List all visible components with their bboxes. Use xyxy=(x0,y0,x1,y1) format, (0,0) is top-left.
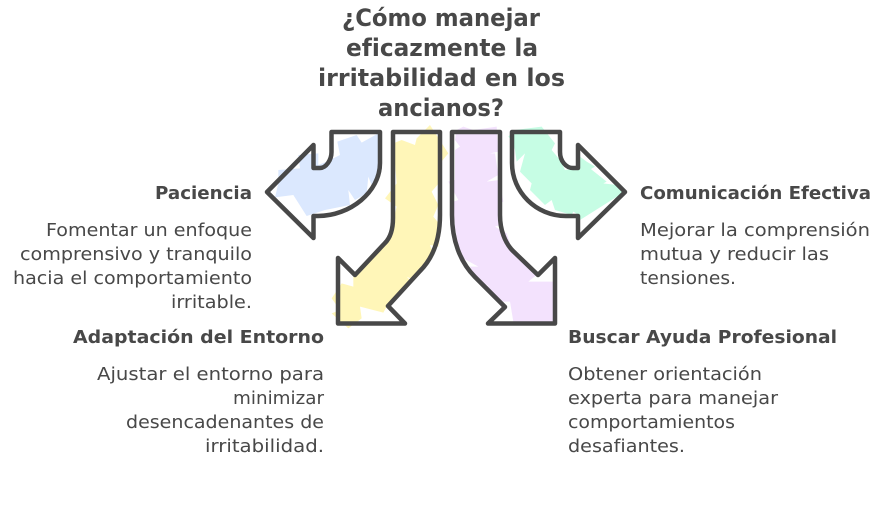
text block: Comunicación Efectiva xyxy=(640,220,870,289)
text block: Adaptación del Entorno: Ajustar el entorno para xyxy=(97,364,324,385)
text block: Paciencia xyxy=(13,220,252,313)
text block: Adaptación del Entorno: minimizar xyxy=(233,388,325,409)
text block: Buscar Ayuda Profesional: desafiantes. xyxy=(568,436,685,457)
title: eficazmente la xyxy=(346,34,538,62)
title: ¿Cómo manejar xyxy=(342,4,540,32)
title: irritabilidad en los xyxy=(318,64,565,92)
text block: Buscar Ayuda Profesional: Obtener orientación xyxy=(568,364,762,385)
text block: Paciencia: Fomentar un enfoque xyxy=(46,220,252,241)
text block: Comunicación Efectiva: mutua y reducir las xyxy=(640,244,829,265)
heading: Adaptación del Entorno: Adaptación del Entorno xyxy=(73,328,324,348)
title xyxy=(318,4,565,122)
text block: Paciencia: irritable. xyxy=(171,292,252,313)
title: ancianos? xyxy=(378,94,504,122)
arrow: green, Comunicación Efectiva xyxy=(508,127,625,238)
text block: Adaptación del Entorno: irritabilidad. xyxy=(205,436,324,457)
text block: Adaptación del Entorno xyxy=(97,364,325,457)
text block: Buscar Ayuda Profesional xyxy=(568,364,779,457)
heading: Paciencia: Paciencia xyxy=(155,184,252,204)
text block: Adaptación del Entorno: desencadenantes de xyxy=(126,412,324,433)
text block: Comunicación Efectiva: tensiones. xyxy=(640,268,736,289)
arrow: yellow, Adaptación del Entorno xyxy=(332,125,448,328)
text block: Paciencia: hacia el comportamiento xyxy=(13,268,252,289)
arrow: blue, Paciencia xyxy=(267,132,380,238)
text block: Buscar Ayuda Profesional: comportamientos xyxy=(568,412,735,433)
text block: Paciencia: comprensivo y tranquilo xyxy=(20,244,252,265)
arrow: purple, Buscar Ayuda Profesional xyxy=(448,127,557,324)
heading: Buscar Ayuda Profesional: Buscar Ayuda Profesional xyxy=(568,328,837,348)
heading: Comunicación Efectiva: Comunicación Efectiva xyxy=(640,184,871,204)
text block: Comunicación Efectiva: Mejorar la comprensión xyxy=(640,220,870,241)
text block: Buscar Ayuda Profesional: experta para manejar xyxy=(568,388,779,409)
